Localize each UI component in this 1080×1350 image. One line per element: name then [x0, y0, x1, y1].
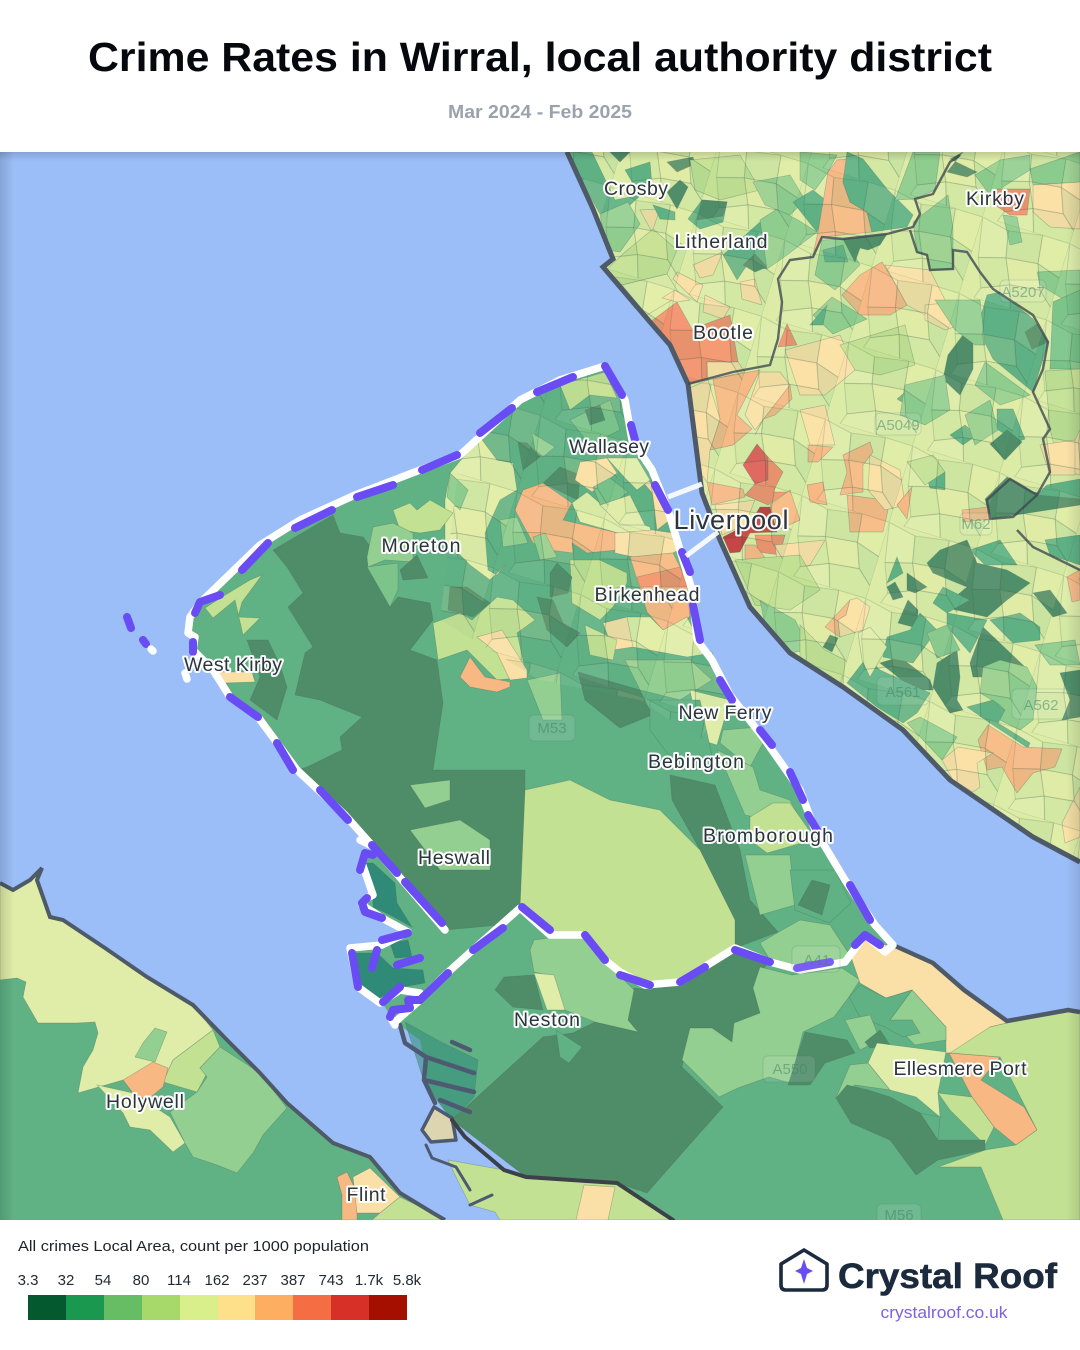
brand name: Crystal Roof: [838, 1257, 1057, 1296]
legend tick labels: 387: [280, 1272, 306, 1289]
place labels: Liverpool: [674, 505, 788, 535]
Merseyside coastline: [567, 152, 1080, 862]
legend tick labels: 114: [167, 1272, 191, 1289]
place labels: Birkenhead: [594, 584, 700, 606]
road badges: A5207: [1001, 284, 1045, 301]
place labels: Kirkby: [966, 188, 1024, 210]
place labels: Litherland: [674, 231, 768, 253]
estuary streams and marsh: [400, 1025, 673, 1220]
road badges: [529, 280, 1070, 1230]
land: Wirral peninsula: [192, 370, 886, 1018]
legend tick labels: 80: [133, 1272, 149, 1289]
map panel: [0, 152, 1080, 1220]
place labels: [106, 178, 1027, 1206]
Wales coastline: [0, 868, 445, 1220]
brand logo: [781, 1250, 1057, 1322]
brand url: crystalroof.co.uk: [880, 1304, 1008, 1322]
place labels: Neston: [514, 1009, 580, 1031]
legend tick labels: 162: [204, 1272, 230, 1289]
Mersey bridges: [668, 484, 718, 556]
road badges: M53: [537, 720, 567, 737]
legend tick labels: 743: [318, 1272, 344, 1289]
legend tick labels: 3.3: [18, 1272, 38, 1289]
place labels: Ellesmere Port: [894, 1058, 1027, 1080]
place labels: Wallasey: [569, 436, 649, 458]
title: Crime Rates in Wirral, local authority district: [88, 34, 992, 80]
place labels: Holywell: [106, 1091, 184, 1113]
legend tick labels: 1.7k: [355, 1272, 384, 1289]
place labels: Bebington: [648, 751, 744, 773]
road badges: A41: [804, 952, 830, 969]
legend tick labels: [18, 1272, 422, 1289]
sea: [0, 152, 1080, 1220]
land: Liverpool and Merseyside: [564, 152, 1080, 859]
legend colour scale: [28, 1295, 407, 1320]
map edge vignette: [0, 152, 1080, 1220]
land: North Wales: [0, 868, 445, 1220]
legend: [18, 1238, 422, 1320]
land: Cheshire south of Wirral: [395, 908, 1080, 1220]
place labels: Bootle: [693, 322, 753, 344]
road badges: A561: [885, 684, 921, 701]
place labels: New Ferry: [678, 702, 772, 724]
road badges: M56: [884, 1207, 914, 1224]
road badges: A562: [1023, 697, 1059, 714]
icon: house with star: [781, 1250, 827, 1290]
subtitle: date range: Mar 2024 - Feb 2025: [448, 102, 632, 122]
road badges: M62: [961, 516, 991, 533]
place labels: West Kirby: [184, 654, 282, 676]
road badges: A550: [772, 1061, 808, 1078]
boundary: purple dashes: [127, 366, 880, 1017]
Wirral boundary: [127, 366, 893, 1025]
legend title: All crimes Local Area, count per 1000 population: [18, 1238, 369, 1255]
legend tick labels: 5.8k: [393, 1272, 422, 1289]
place labels: Crosby: [604, 178, 668, 200]
legend tick labels: 32: [58, 1272, 74, 1289]
road badges: A5049: [876, 417, 920, 434]
islands: white specks: [151, 649, 153, 651]
place labels: Flint: [346, 1184, 386, 1206]
legend tick labels: 54: [95, 1272, 111, 1289]
district border lines: [688, 155, 1080, 570]
boundary: white outline: [185, 366, 893, 1025]
place labels: Heswall: [418, 847, 490, 869]
legend tick labels: 237: [242, 1272, 268, 1289]
place labels: Bromborough: [703, 825, 833, 847]
Cheshire coastline: [893, 945, 1080, 1021]
place labels: Moreton: [382, 535, 460, 557]
